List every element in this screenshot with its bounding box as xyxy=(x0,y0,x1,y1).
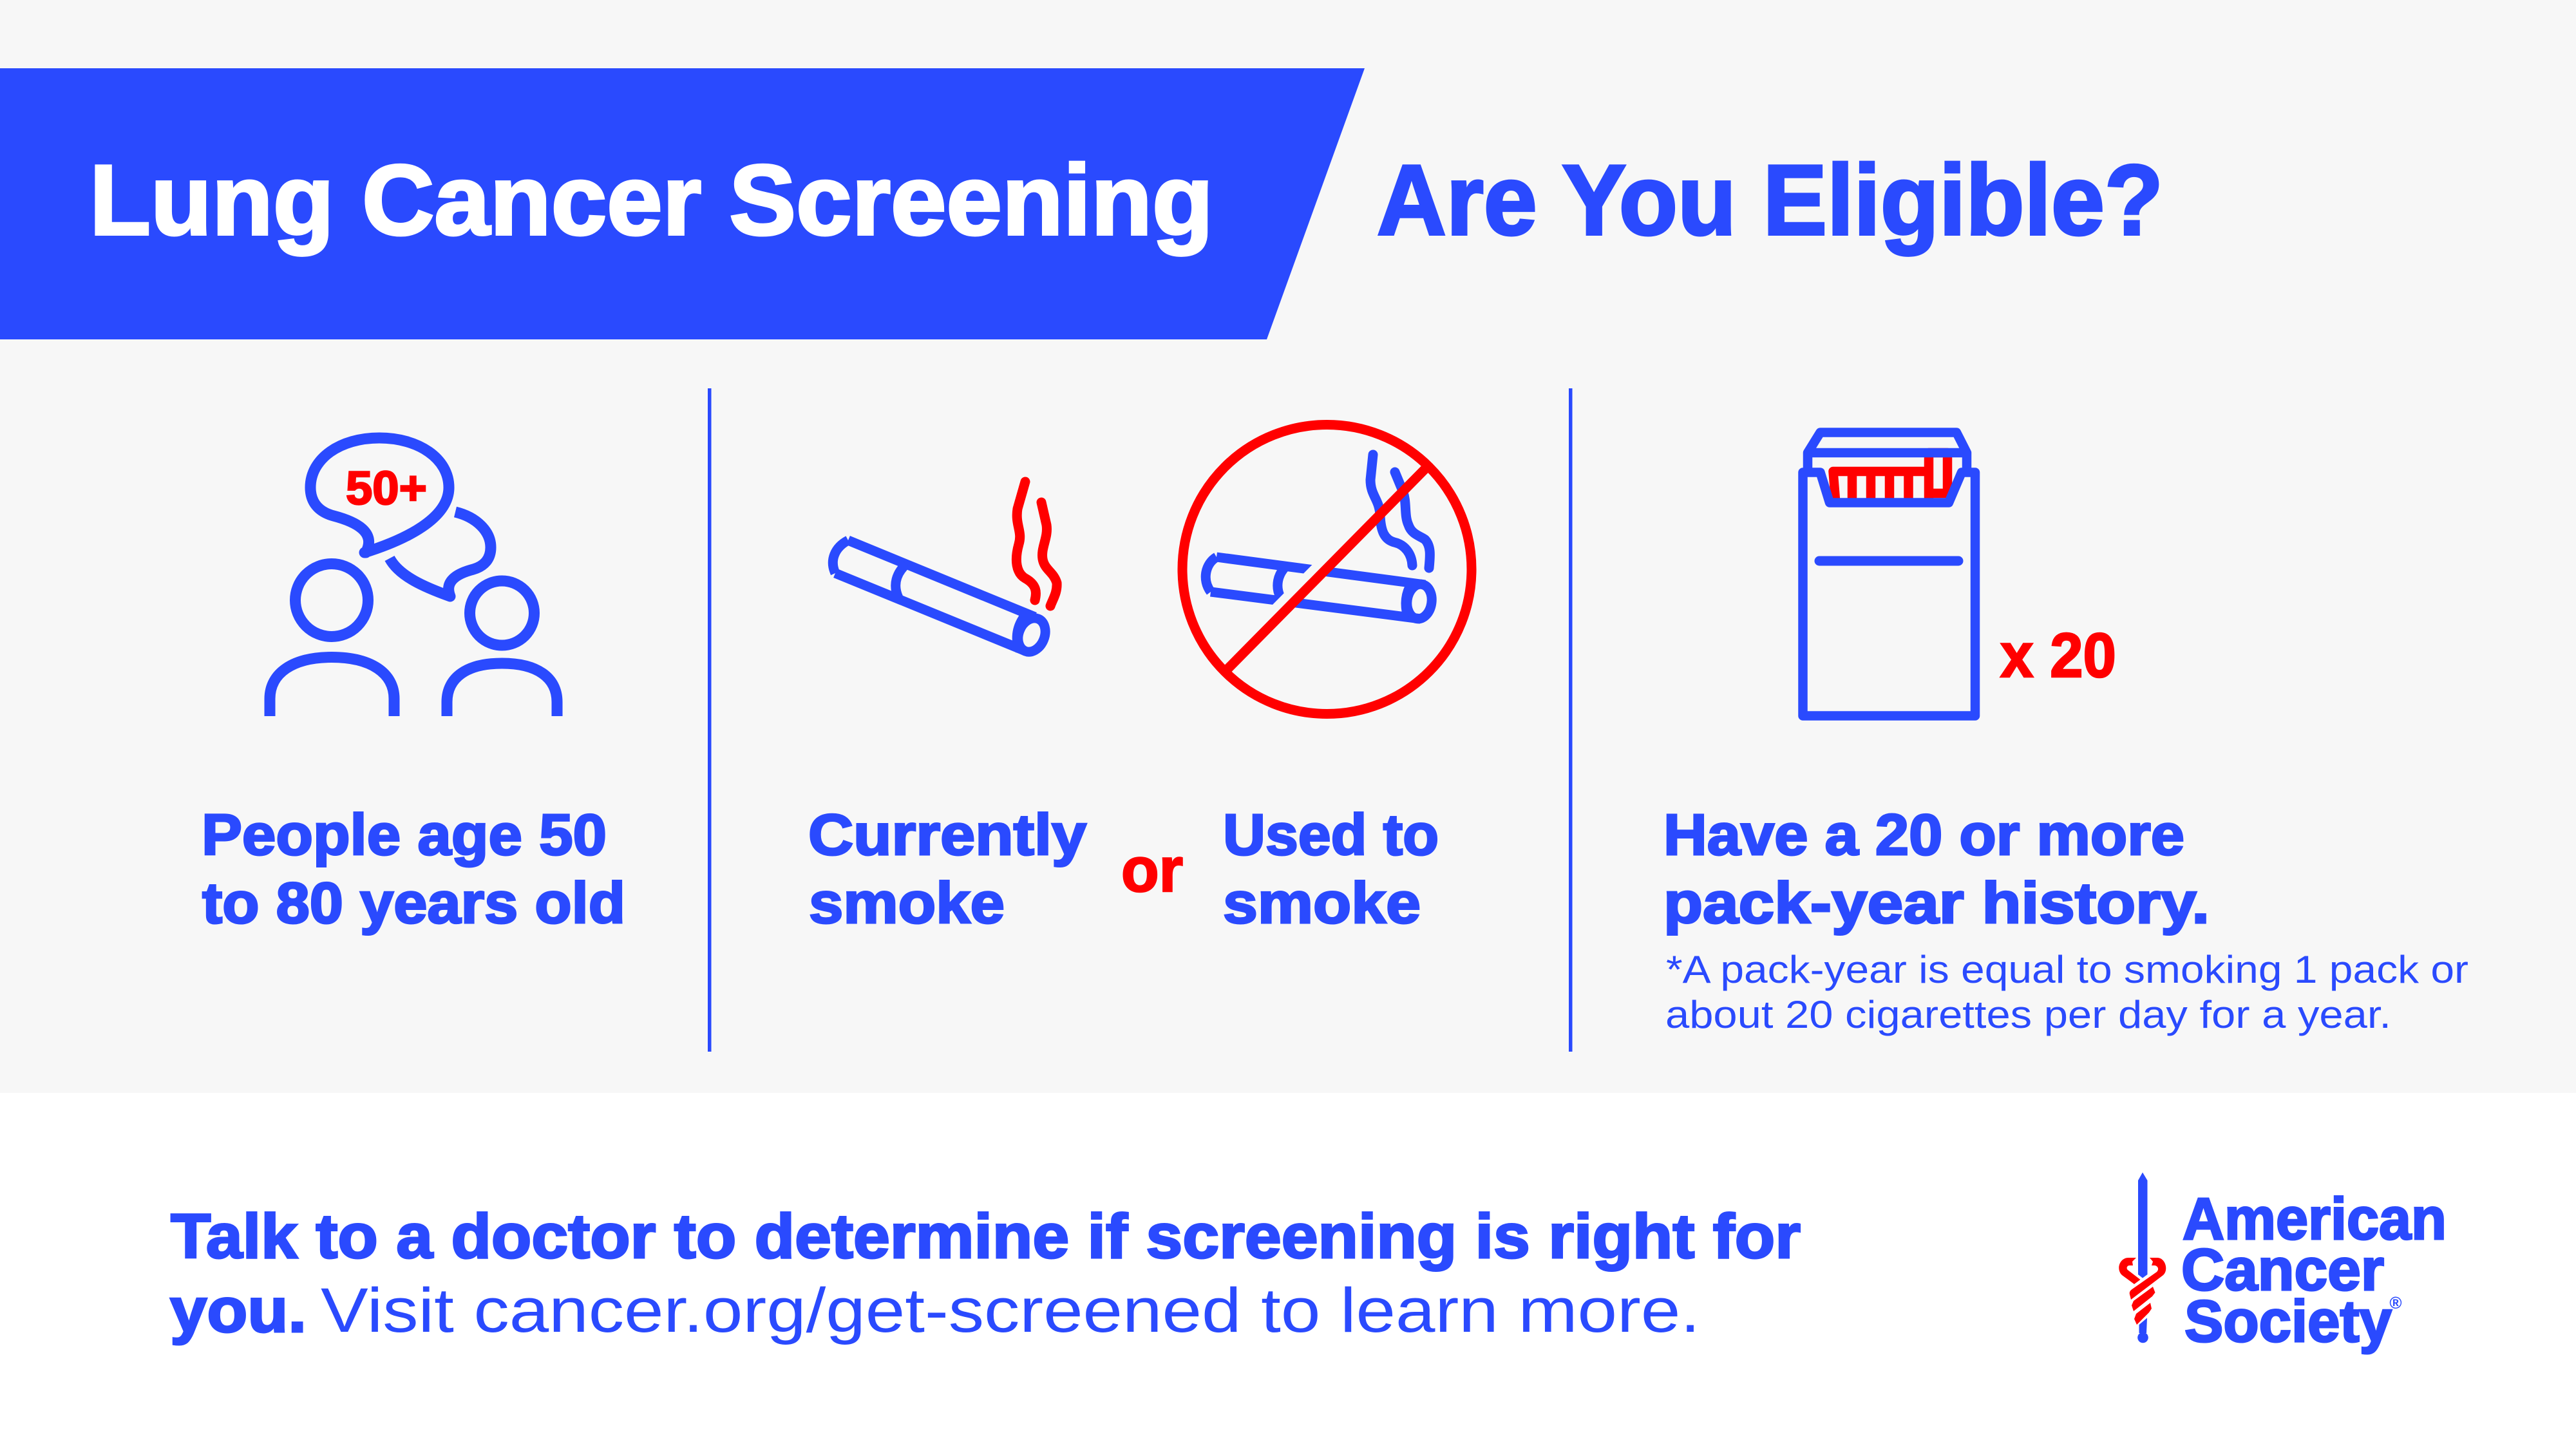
label: 50+: 50+ xyxy=(346,462,427,515)
speech bubble right xyxy=(390,512,491,596)
footnote xyxy=(1665,948,2468,1036)
title: Lung Cancer Screening: Lung Cancer Screening xyxy=(90,144,1213,256)
wordmark: Society xyxy=(2184,1289,2392,1354)
text: People age 50 to 80 years old xyxy=(202,803,625,936)
footnote: about 20 cigarettes per day for a year. xyxy=(1665,993,2391,1036)
text: pack-year history: pack-year history. xyxy=(1663,871,2210,936)
sword xyxy=(2137,1172,2148,1343)
text: Currently smoke: smoke xyxy=(809,871,1005,936)
text: or: or xyxy=(1121,835,1183,905)
text: People age 50 to 80 years old: to 80 years old xyxy=(202,871,625,936)
text: pack-year history xyxy=(1663,803,2468,1036)
call to action: Visit cancer.org/get-screened to learn more. xyxy=(321,1275,1700,1345)
text: People age 50 to 80 years old: People age 50 xyxy=(202,803,607,867)
wordmark: ® xyxy=(2389,1293,2402,1312)
icon: two people talking, 50+ xyxy=(270,438,557,716)
cigarettes xyxy=(1833,453,1947,500)
header banner xyxy=(0,68,1365,339)
text: Used to smoke xyxy=(1223,803,1439,936)
icon: lit cigarette xyxy=(833,482,1057,656)
cigarette xyxy=(1206,557,1434,620)
right person xyxy=(447,581,557,716)
call to action: you. xyxy=(170,1275,307,1345)
pack outline xyxy=(1803,433,1975,716)
gap beside slash xyxy=(1265,538,1345,619)
smoke xyxy=(1370,455,1430,568)
cigarette body xyxy=(833,540,1050,656)
text: Used to smoke: smoke xyxy=(1223,871,1421,936)
text: Used to smoke: Used to xyxy=(1223,803,1439,867)
text: Currently smoke xyxy=(808,803,1086,936)
snake xyxy=(2119,1258,2166,1325)
column divider 1 xyxy=(708,388,711,1052)
footnote: *A pack-year is equal to smoking 1 pack or xyxy=(1666,948,2468,991)
wordmark: American xyxy=(2183,1186,2447,1252)
wordmark: Cancer xyxy=(2181,1237,2384,1303)
subtitle: Are You Eligible?: Are You Eligible? xyxy=(1377,144,2163,256)
American Cancer Society logo xyxy=(2119,1172,2447,1354)
prohibition slash xyxy=(1227,467,1427,670)
icon: cigarette pack xyxy=(1803,433,1975,716)
call to action xyxy=(170,1201,1801,1345)
text: Currently smoke: Currently xyxy=(808,803,1086,867)
label: x 20: x 20 xyxy=(2000,620,2116,690)
smoke xyxy=(1016,482,1057,606)
call to action: Talk to a doctor to determine if screening is right for xyxy=(171,1201,1801,1271)
speech bubble left xyxy=(310,438,449,553)
wordmark xyxy=(2181,1186,2447,1354)
left person xyxy=(270,564,394,716)
text: pack-year history: Have a 20 or more xyxy=(1663,803,2184,867)
column divider 2 xyxy=(1569,388,1573,1052)
prohibition circle xyxy=(1182,425,1472,714)
icon: no smoking xyxy=(1182,425,1472,714)
